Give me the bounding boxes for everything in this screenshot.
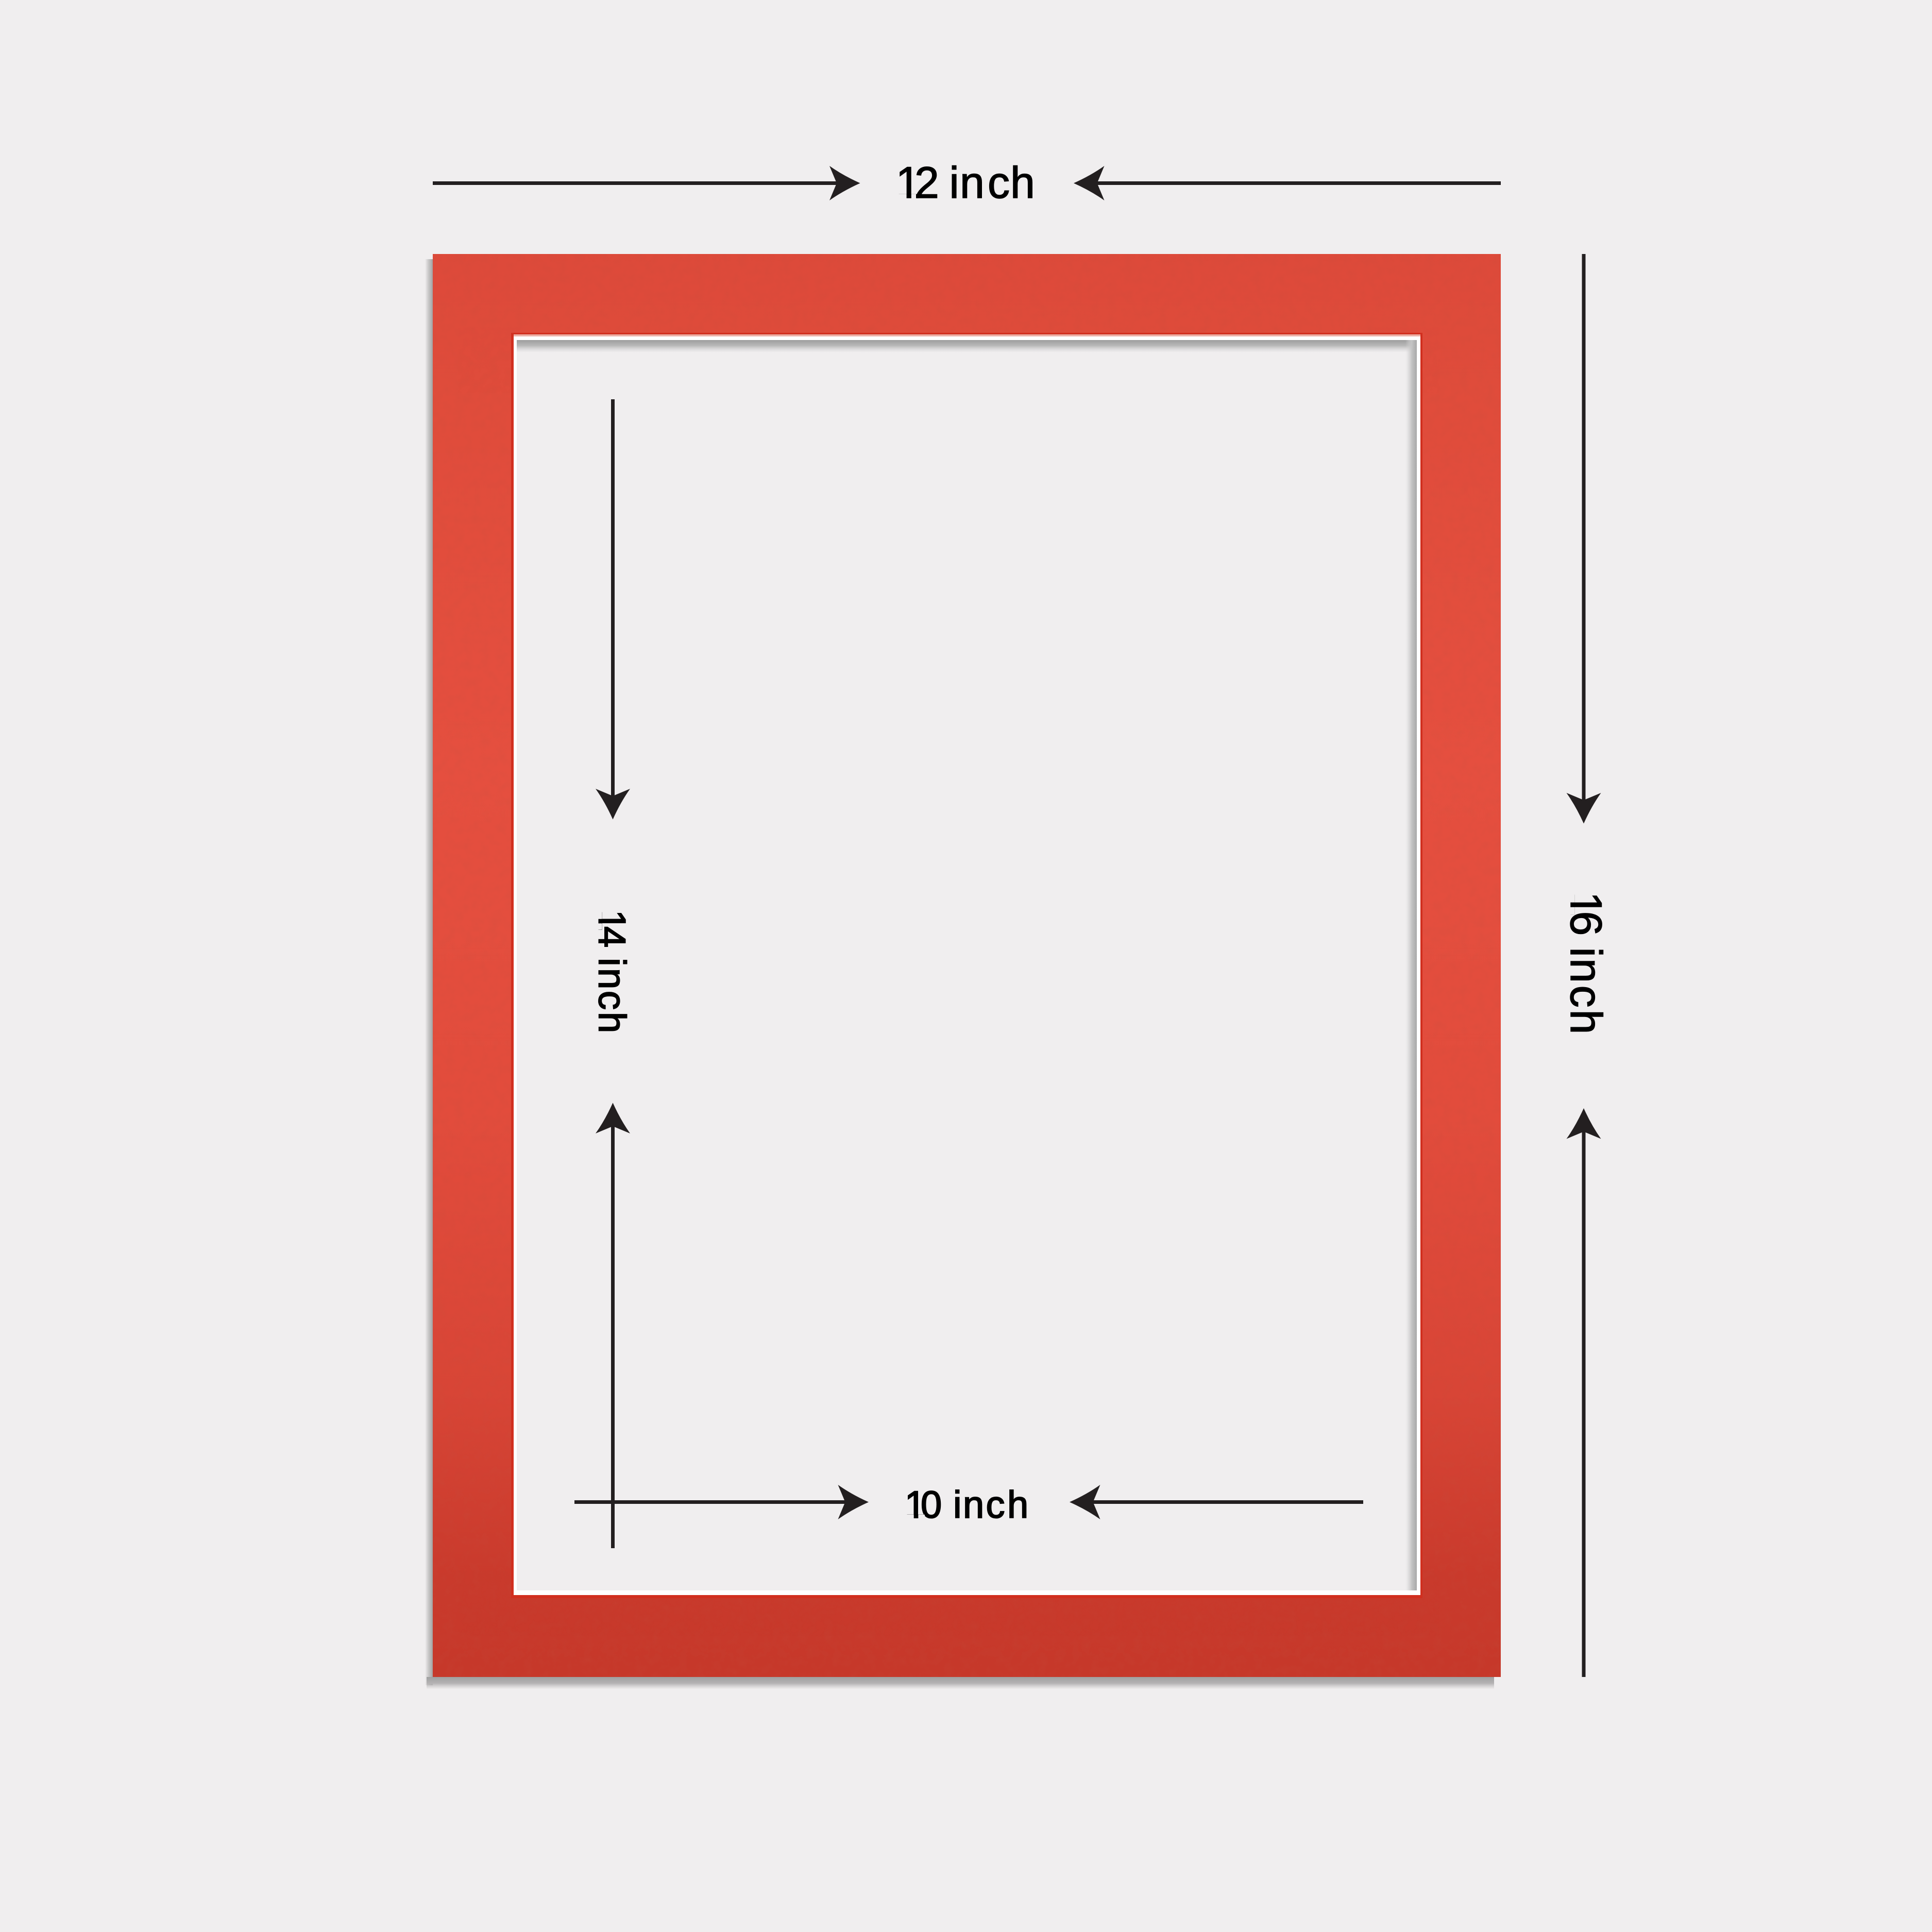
arrow: inner height, bottom segment bbox=[596, 1103, 630, 1548]
label: 16 inch: 16 inch bbox=[1561, 892, 1611, 1034]
arrow: inner width, left segment bbox=[574, 1485, 869, 1519]
panel: red mat board frame bbox=[425, 254, 1501, 1689]
arrow: top width, left segment bbox=[433, 166, 860, 200]
arrow: inner height, top segment bbox=[596, 399, 630, 819]
label: 10 inch: 10 inch bbox=[905, 1483, 1028, 1526]
arrow: inner width, right segment bbox=[1070, 1485, 1363, 1519]
label: 14 inch: 14 inch bbox=[590, 910, 634, 1033]
bevelled inner edge of the opening bbox=[511, 333, 1422, 1598]
arrow: outer height, bottom segment bbox=[1566, 1108, 1601, 1677]
label: 12 inch: 12 inch bbox=[896, 158, 1035, 208]
arrow: outer height, top segment bbox=[1566, 254, 1601, 823]
inner opening with shadow bbox=[517, 340, 1417, 1590]
arrow: top width, right segment bbox=[1074, 166, 1501, 200]
frame drop shadow bbox=[425, 259, 1494, 1689]
red mat border bbox=[433, 254, 1501, 1677]
